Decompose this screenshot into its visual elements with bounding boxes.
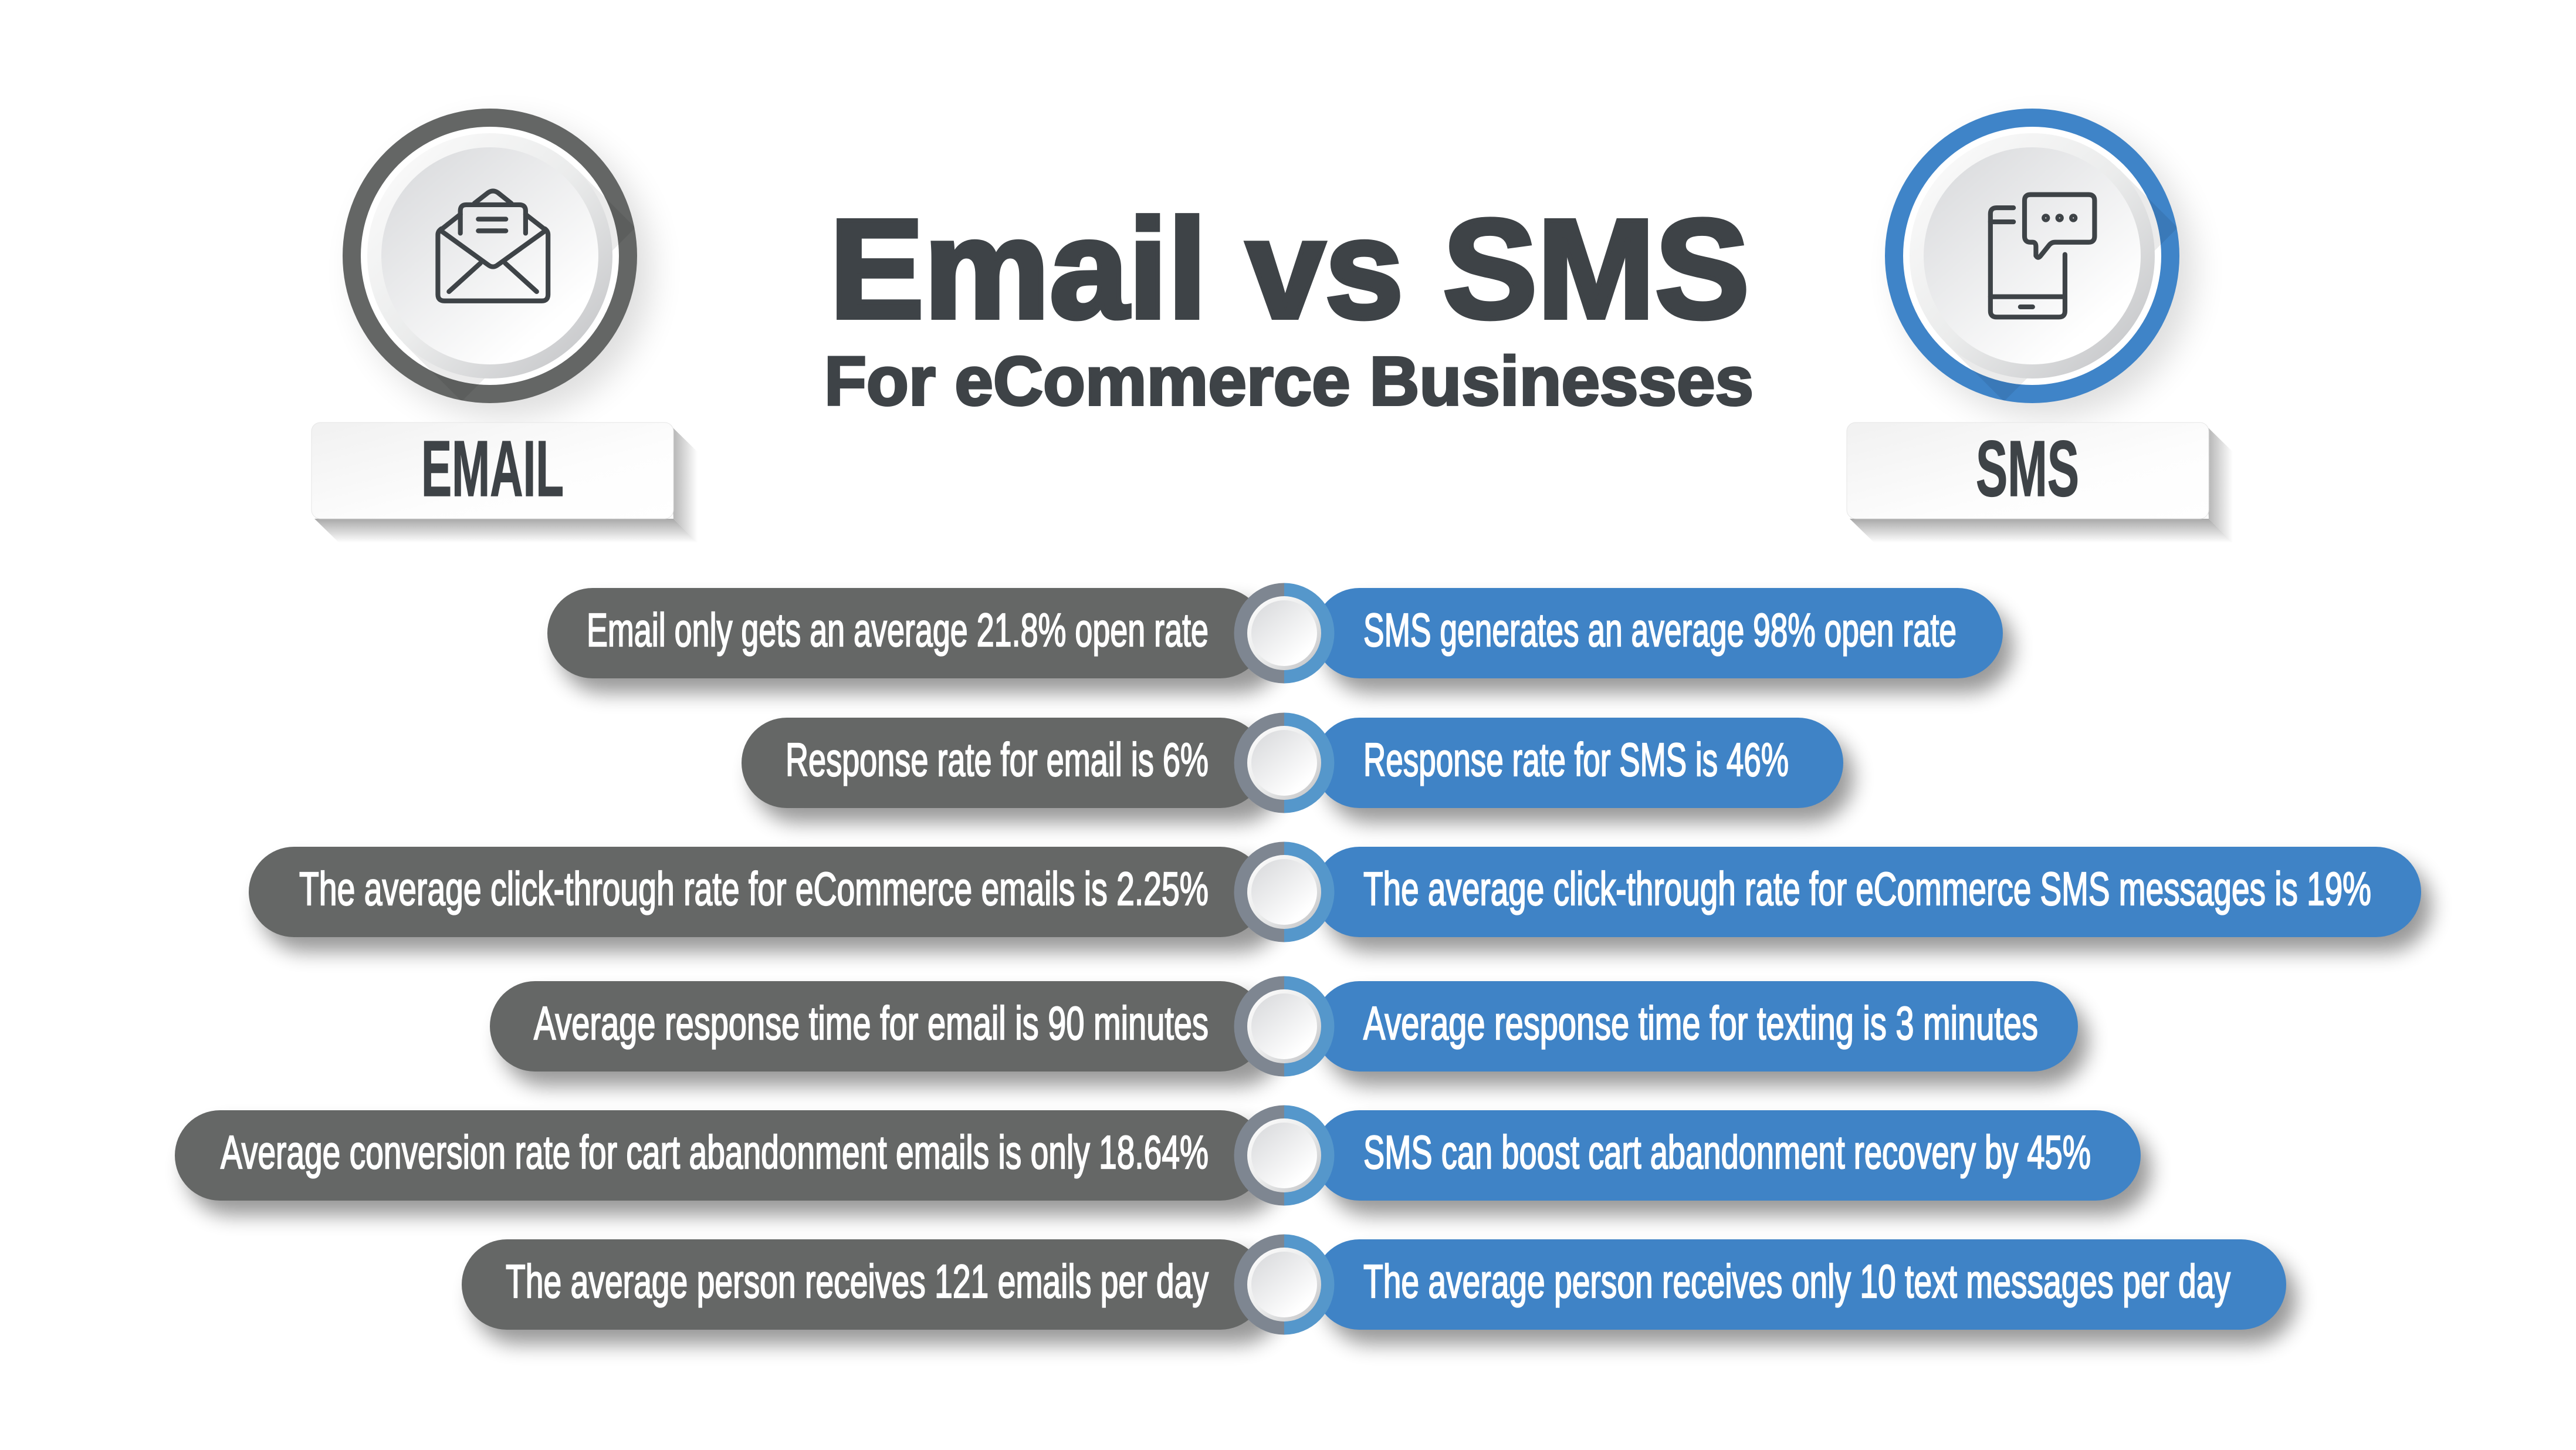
email pill: click-through rate: The average click-through rate for eCommerce emails is 2.25%	[299, 863, 1209, 915]
email pill: emails per day	[462, 1239, 1284, 1344]
comparison row 5: cart abandonment	[175, 1106, 2151, 1215]
comparison row 3: click-through rate	[249, 841, 2432, 952]
comparison row 6: messages per day	[462, 1235, 2297, 1344]
sms pill: open rate	[1314, 588, 2013, 693]
subtitle: For eCommerce Businesses	[824, 343, 1754, 420]
sms pill: response rate	[1314, 718, 1854, 823]
sms label: SMS	[1976, 424, 2079, 513]
email pill: cart abandonment	[175, 1110, 1284, 1215]
email badge	[343, 109, 652, 418]
icon: open envelope	[438, 191, 548, 301]
sms pill: cart abandonment	[1314, 1110, 2151, 1215]
email pill: cart abandonment: Average conversion rate for cart abandonment emails is only 18.64%	[221, 1126, 1209, 1178]
connector node	[1234, 712, 1334, 813]
email pill: response time: Average response time for email is 90 minutes	[534, 997, 1209, 1049]
email pill: response rate: Response rate for email is 6%	[786, 734, 1209, 786]
sms pill: response time: Average response time for texting is 3 minutes	[1363, 997, 2038, 1049]
connector node	[1234, 976, 1334, 1076]
email pill: click-through rate	[249, 847, 1284, 952]
connector node	[1234, 1235, 1334, 1334]
sms pill: response time	[1314, 981, 2088, 1086]
sms label	[1847, 423, 2233, 543]
sms header panel	[1847, 109, 2233, 543]
connector node	[1234, 583, 1334, 683]
email pill: response rate	[742, 718, 1284, 823]
connector node	[1234, 841, 1334, 942]
email pill: emails per day: The average person receives 121 emails per day	[506, 1255, 1209, 1307]
sms pill: response rate: Response rate for SMS is 46%	[1363, 734, 1789, 786]
sms pill: cart abandonment: SMS can boost cart abandonment recovery by 45%	[1363, 1126, 2091, 1178]
comparison row 1: open rate	[547, 583, 2013, 693]
sms pill: texts per day	[1314, 1239, 2297, 1344]
title: Email vs SMS	[830, 190, 1749, 347]
sms badge	[1885, 109, 2194, 418]
sms pill: click-through rate	[1314, 847, 2432, 952]
email pill: open rate	[547, 588, 1284, 693]
email header panel	[312, 109, 698, 543]
comparison row 4: response time	[490, 976, 2088, 1086]
email pill: response time	[490, 981, 1284, 1086]
email pill: open rate: Email only gets an average 21.8% open rate	[587, 604, 1209, 656]
email label	[312, 423, 698, 543]
comparison row 2: response rate	[742, 712, 1854, 823]
icon: phone with chat bubble	[1991, 195, 2094, 317]
connector node	[1234, 1106, 1334, 1205]
email label: EMAIL	[421, 424, 564, 513]
sms pill: open rate: SMS generates an average 98% open rate	[1363, 604, 1956, 656]
